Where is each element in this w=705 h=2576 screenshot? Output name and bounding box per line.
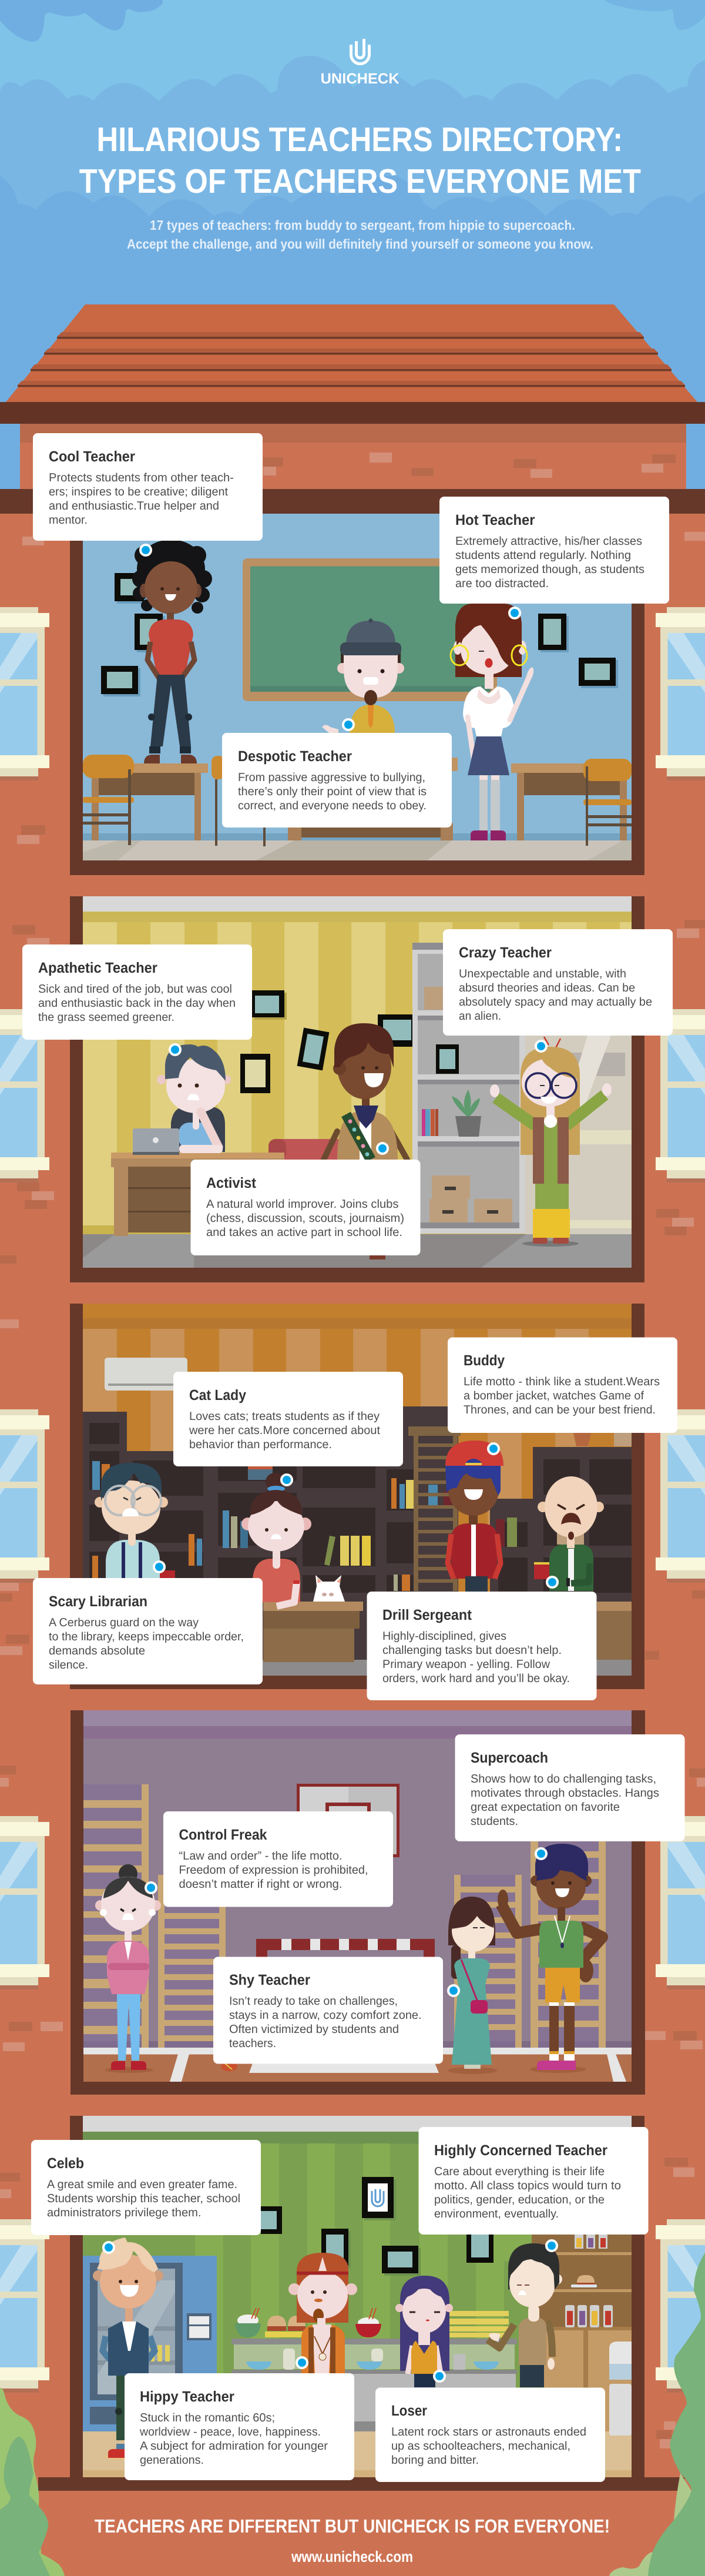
icon: dishes in case bbox=[246, 2349, 499, 2370]
marker dots bbox=[102, 2239, 558, 2383]
card: Hot Teacher bbox=[439, 497, 669, 604]
card: Despotic Teacher: Despotic Teacher bbox=[238, 748, 352, 765]
card: Highly Concerned Teacher: politics, gender, education, or the bbox=[434, 2193, 605, 2206]
character: supercoach bbox=[498, 1844, 602, 2073]
card: Highly Concerned Teacher: Highly Concerned Teacher bbox=[434, 2142, 607, 2159]
card: Hippy Teacher bbox=[125, 2373, 354, 2480]
card: Celeb: Celeb bbox=[47, 2155, 84, 2172]
card: Supercoach bbox=[455, 1734, 685, 1841]
card: Drill Sergeant bbox=[367, 1592, 597, 1700]
panel: library bbox=[33, 1304, 677, 1700]
card: Scary Librarian: A Cerberus guard on the way bbox=[49, 1616, 199, 1629]
panel: gym bbox=[70, 1710, 685, 2095]
shelving unit bbox=[412, 943, 525, 1234]
card: Highly Concerned Teacher: motto. All class topics would turn to bbox=[434, 2179, 621, 2192]
air conditioner bbox=[105, 1358, 187, 1391]
card: Hot Teacher: students attend regularly. Nothing bbox=[455, 549, 631, 562]
card: Crazy Teacher: Unexpectable and unstable, with bbox=[459, 967, 626, 980]
door and background wall bbox=[525, 1036, 632, 1234]
basketball backboard bbox=[297, 1784, 400, 1857]
card: Supercoach: students. bbox=[471, 1815, 518, 1828]
card: Celeb bbox=[31, 2140, 261, 2235]
icon: burger on plate bbox=[571, 2275, 597, 2287]
icon: green rice bowl bbox=[235, 2308, 261, 2337]
character: scary librarian bbox=[95, 1463, 168, 1578]
character: cool teacher bbox=[132, 540, 212, 763]
mugs bbox=[160, 1562, 549, 1579]
tree: right bbox=[609, 2253, 705, 2576]
vending machine bbox=[83, 2256, 217, 2431]
side windows bbox=[0, 607, 705, 2393]
card: Apathetic Teacher: and enthusiastic back in the day when bbox=[38, 997, 236, 1010]
card: Supercoach: motivates through obstacles. Hangs bbox=[471, 1787, 659, 1800]
card: Scary Librarian: to the library, keeps impeccable order, bbox=[49, 1630, 244, 1643]
icon: red rice bowl bbox=[355, 2308, 381, 2337]
icon: cat bbox=[313, 1575, 345, 1602]
marker dots bbox=[145, 1847, 548, 1997]
card: Highly Concerned Teacher: Care about everything is their life bbox=[434, 2165, 605, 2178]
card: Supercoach: Shows how to do challenging tasks, bbox=[471, 1773, 656, 1786]
card: Hot Teacher: Hot Teacher bbox=[455, 512, 535, 528]
card: Drill Sergeant: challenging tasks but doesn’t help. bbox=[382, 1644, 562, 1657]
card: Crazy Teacher: absolutely spacy and may actually be bbox=[459, 996, 652, 1009]
sofa bbox=[268, 1139, 395, 1160]
wood shelves bbox=[532, 2235, 632, 2431]
card: Shy Teacher: Often victimized by students and bbox=[229, 2023, 399, 2036]
bookcases bbox=[83, 1406, 632, 1660]
card: Cat Lady: were her cats.More concerned about bbox=[189, 1424, 380, 1437]
card: Loser: Loser bbox=[391, 2403, 427, 2419]
footer url: www.unicheck.com bbox=[291, 2548, 413, 2565]
desk and laptop bbox=[111, 1153, 284, 1236]
icon: books bbox=[422, 1109, 438, 1136]
card: Crazy Teacher: absurd theories and ideas. Can be bbox=[459, 982, 635, 994]
card: Drill Sergeant: orders, work hard and you’ll be okay. bbox=[382, 1672, 570, 1685]
ball bbox=[221, 2062, 237, 2071]
card: Drill Sergeant: Highly-disciplined, gives bbox=[382, 1630, 506, 1643]
card: Loser: up as schoolteachers, mechanical, bbox=[391, 2440, 570, 2453]
roof bbox=[0, 304, 705, 424]
card: Supercoach: great expectation on favorite bbox=[471, 1801, 620, 1814]
books bbox=[92, 1461, 517, 1591]
wall pictures bbox=[261, 2177, 494, 2276]
card: Hippy Teacher: Stuck in the romantic 60s; bbox=[140, 2411, 275, 2424]
card: Hot Teacher: Extremely attractive, his/her classes bbox=[455, 535, 642, 548]
card: Control Freak: Control Freak bbox=[179, 1827, 267, 1843]
icon: bottles bbox=[565, 2235, 613, 2327]
card: Scary Librarian: silence. bbox=[49, 1659, 88, 1671]
card: Activist: Activist bbox=[206, 1175, 257, 1191]
card: Buddy: Buddy bbox=[464, 1352, 505, 1369]
card: Buddy: Life motto - think like a student.Wears bbox=[464, 1375, 660, 1388]
top shelf items bbox=[573, 1433, 632, 1446]
title: HILARIOUS TEACHERS DIRECTORY: bbox=[96, 120, 623, 159]
card: Cool Teacher: ers; inspires to be creative; diligent bbox=[49, 485, 228, 498]
card: Apathetic Teacher: Apathetic Teacher bbox=[38, 960, 157, 976]
card: Highly Concerned Teacher: environment, eventually. bbox=[434, 2207, 559, 2220]
card: Hippy Teacher: generations. bbox=[140, 2454, 204, 2467]
character: shy teacher bbox=[448, 1897, 497, 2074]
character: crazy teacher bbox=[490, 1037, 612, 1247]
card: Shy Teacher: teachers. bbox=[229, 2037, 276, 2050]
ladder bbox=[408, 1426, 461, 1591]
wall pictures bbox=[240, 990, 413, 1093]
card: Cat Lady: behavior than performance. bbox=[189, 1438, 332, 1451]
card: Buddy: a bomber jacket, watches Game of bbox=[464, 1389, 644, 1402]
card: Scary Librarian: Scary Librarian bbox=[49, 1593, 147, 1610]
card: Scary Librarian bbox=[33, 1578, 263, 1684]
card: Activist: (chess, discussion, scouts, journaism) bbox=[206, 1212, 404, 1225]
card: Hot Teacher: gets memorized though, as students bbox=[455, 563, 644, 576]
card: Activist: and takes an active part in school life. bbox=[206, 1226, 402, 1239]
card: Hippy Teacher: worldview - peace, love, happiness. bbox=[139, 2426, 321, 2438]
desks and chairs bbox=[83, 755, 632, 846]
card: Supercoach: Supercoach bbox=[471, 1750, 548, 1766]
cloud: top right bbox=[605, 0, 705, 30]
tree: left bbox=[0, 2388, 65, 2576]
card: Despotic Teacher: correct, and everyone needs to obey. bbox=[238, 799, 427, 812]
footer headline: TEACHERS ARE DIFFERENT BUT UNICHECK IS FOR EVERYONE! bbox=[95, 2515, 610, 2537]
card: Shy Teacher: Isn’t ready to take on challenges, bbox=[229, 1995, 398, 2008]
card: Cool Teacher: and enthusiastic.True helper and bbox=[49, 500, 219, 512]
card: Scary Librarian: demands absolute bbox=[49, 1644, 145, 1657]
card: Cool Teacher: mentor. bbox=[49, 514, 88, 527]
water cooler bbox=[609, 2341, 632, 2436]
card: Cool Teacher: Cool Teacher bbox=[49, 448, 135, 465]
card: Cat Lady: Cat Lady bbox=[189, 1387, 246, 1403]
marker dots bbox=[153, 1442, 559, 1589]
card: Hippy Teacher: Hippy Teacher bbox=[140, 2389, 234, 2405]
card: Celeb: A great smile and even greater fame. bbox=[47, 2178, 237, 2191]
card: Cat Lady: Loves cats; treats students as if they bbox=[189, 1410, 380, 1423]
card: Control Freak bbox=[163, 1811, 393, 1907]
card: Loser: boring and bitter. bbox=[391, 2454, 479, 2467]
card: Shy Teacher bbox=[213, 1957, 443, 2064]
card: Shy Teacher: stays in a narrow, cozy comfort zone. bbox=[229, 2009, 422, 2022]
icon: laptop bbox=[133, 1128, 179, 1155]
card: Apathetic Teacher: Sick and tired of the job, but was cool bbox=[38, 983, 232, 996]
icon: burgers on tray bbox=[265, 2316, 306, 2337]
card: Despotic Teacher bbox=[222, 733, 452, 828]
card: Drill Sergeant: Drill Sergeant bbox=[382, 1607, 472, 1623]
card: Hippy Teacher: A subject for admiration for younger bbox=[140, 2440, 328, 2453]
card: Hot Teacher: are too distracted. bbox=[455, 577, 549, 590]
wall bars bbox=[83, 1784, 606, 2048]
icon: yellow trays bbox=[449, 2311, 509, 2337]
card: Activist: A natural world improver. Joins clubs bbox=[206, 1198, 398, 1211]
character: highly concerned teacher bbox=[488, 2243, 562, 2387]
cloud layer: middle bbox=[0, 56, 705, 329]
card: Cool Teacher: Protects students from other teach- bbox=[49, 471, 234, 484]
character: celeb bbox=[93, 2237, 163, 2460]
character: drill sergeant bbox=[538, 1476, 604, 1591]
card: Crazy Teacher: Crazy Teacher bbox=[459, 944, 552, 961]
character: loser bbox=[395, 2276, 453, 2387]
subtitle bbox=[127, 217, 593, 252]
icon: potted plant bbox=[452, 1090, 481, 1137]
card: Loser bbox=[375, 2387, 605, 2482]
character: buddy bbox=[445, 1441, 503, 1592]
icon: unicheck logo picture bbox=[372, 2189, 384, 2206]
logo: Unicheck bbox=[321, 39, 400, 87]
marker dots bbox=[169, 1040, 548, 1155]
character: activist bbox=[324, 1023, 407, 1259]
title: TYPES OF TEACHERS EVERYONE MET bbox=[79, 162, 641, 200]
card: Despotic Teacher: there’s only their point of view that is bbox=[238, 785, 427, 798]
wall bricks bbox=[0, 453, 705, 2448]
icon: boxes bbox=[429, 1175, 512, 1222]
character: apathetic teacher bbox=[133, 1044, 231, 1155]
hurdle bbox=[256, 1939, 435, 1974]
card: Highly Concerned Teacher bbox=[418, 2127, 649, 2235]
card: Shy Teacher: Shy Teacher bbox=[229, 1972, 310, 1988]
title bbox=[79, 120, 641, 200]
desks and floor bbox=[83, 1602, 632, 1676]
card: Apathetic Teacher: the grass seemed greener. bbox=[38, 1011, 174, 1024]
character: despotic teacher bbox=[322, 618, 404, 733]
card: Control Freak: doesn’t matter if right or wrong. bbox=[179, 1878, 342, 1891]
card: Apathetic Teacher bbox=[22, 944, 252, 1040]
card: Crazy Teacher bbox=[443, 929, 673, 1036]
card: Activist bbox=[190, 1160, 421, 1255]
card: Loser: Latent rock stars or astronauts ended bbox=[391, 2426, 586, 2438]
card: Despotic Teacher: From passive aggressive to bullying, bbox=[238, 771, 425, 784]
cloud layer: lower bbox=[0, 176, 705, 529]
cloud: top left bbox=[0, 0, 163, 42]
food counter bbox=[231, 2308, 519, 2431]
icon: paperclip U bbox=[351, 39, 369, 63]
logo: Unicheck: UNICHECK bbox=[321, 71, 400, 87]
subtitle: 17 types of teachers: from buddy to sergeant, from hippie to supercoach. bbox=[150, 217, 575, 233]
card: Crazy Teacher: an alien. bbox=[459, 1010, 501, 1023]
card: Cat Lady bbox=[173, 1372, 403, 1466]
card: Drill Sergeant: Primary weapon - yelling. Follow bbox=[382, 1658, 550, 1671]
blackboard bbox=[243, 558, 497, 701]
sky background bbox=[0, 0, 705, 529]
card: Control Freak: “Law and order” - the life motto. bbox=[179, 1850, 342, 1863]
character: cat lady bbox=[241, 1473, 345, 1606]
panel: staff room bbox=[22, 896, 673, 1282]
card: Cool Teacher bbox=[33, 433, 263, 541]
wall pictures bbox=[101, 573, 618, 696]
card: Buddy bbox=[448, 1338, 677, 1433]
card: Celeb: Students worship this teacher, school bbox=[47, 2192, 240, 2205]
subtitle: Accept the challenge, and you will definitely find yourself or someone you know. bbox=[127, 236, 593, 252]
marker dots bbox=[139, 544, 521, 731]
character: hot teacher bbox=[451, 604, 535, 840]
card: Celeb: administrators privilege them. bbox=[47, 2206, 201, 2219]
card: Control Freak: Freedom of expression is prohibited, bbox=[179, 1864, 368, 1877]
card: Buddy: Thrones, and can be your best friend. bbox=[464, 1403, 656, 1416]
character: hippy teacher bbox=[288, 2253, 357, 2373]
panel: cafeteria bbox=[31, 2116, 684, 2491]
panel: classroom bbox=[33, 433, 669, 875]
character: control freak bbox=[95, 1864, 161, 2073]
